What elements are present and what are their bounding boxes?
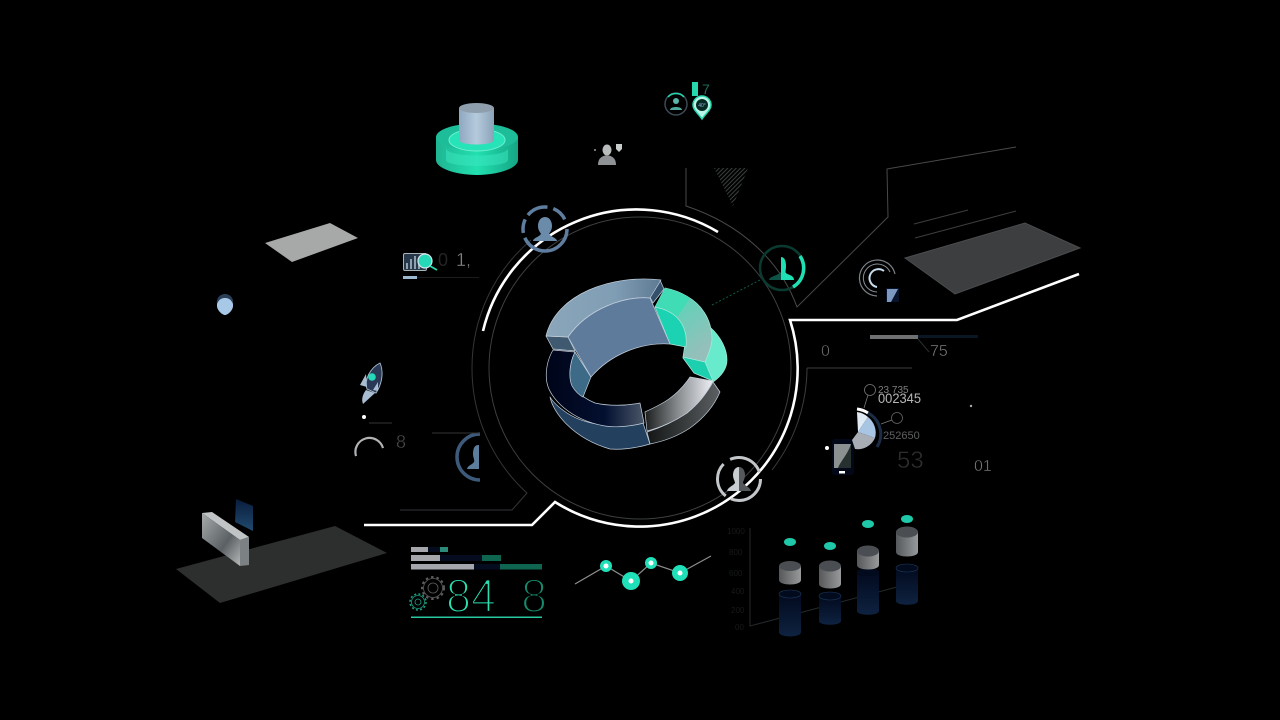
icon: map pin (693, 96, 711, 119)
icon: teal disc and cylinder (436, 103, 518, 175)
bars and counter widget: 84 (446, 569, 496, 622)
panel: grey plate top-left (265, 223, 358, 262)
map fragment (714, 168, 748, 206)
icon: rocket (360, 363, 382, 404)
bar chart: isometric cylinders: 600 (729, 569, 743, 578)
icon: screen (235, 499, 253, 531)
pie chart widget: 002345 (878, 390, 921, 406)
line chart (575, 556, 711, 590)
icon: magnifier panel: 1, (456, 250, 471, 270)
icon: people (594, 144, 622, 165)
cylinder 1 (779, 538, 801, 636)
readout: 0 and 75: 75 (930, 343, 948, 360)
icon: block (202, 512, 249, 566)
readout: 0 and 75 (821, 335, 978, 360)
icon: ring person slate (523, 207, 567, 251)
pie chart widget (852, 384, 992, 475)
pie chart widget: 53 (897, 447, 924, 474)
bar chart: isometric cylinders (727, 515, 918, 636)
icon: magnifier panel (403, 250, 479, 279)
icon: magnifier panel: 0 (438, 250, 448, 270)
icon: battery and value: 7 (702, 81, 710, 97)
icon: ring person teal (760, 246, 804, 290)
bars and counter widget: 8 (521, 569, 547, 622)
bar chart: isometric cylinders: 1000 (727, 527, 745, 536)
gauge readout (355, 415, 406, 456)
icon: ring person fading (432, 433, 480, 480)
dashed connector (712, 280, 760, 305)
bar chart: isometric cylinders: 200 (731, 606, 745, 615)
panel: right plate (905, 223, 1080, 294)
icon: user ring small (665, 93, 687, 115)
icon: battery and value (692, 81, 710, 97)
segment: slate (546, 279, 670, 377)
cylinder 3 (857, 520, 879, 615)
icon: gears (410, 577, 444, 610)
icon: concentric arcs (859, 260, 899, 302)
icon: phone (825, 439, 854, 475)
3D segmented donut chart (546, 279, 727, 449)
icon: head (217, 294, 233, 315)
cylinder 2 (819, 542, 841, 625)
bars and counter widget (410, 547, 547, 622)
segment: navy (546, 350, 650, 449)
bar chart: isometric cylinders: 400 (731, 587, 745, 596)
gauge readout: 8 (396, 432, 406, 452)
cylinder 4 (896, 515, 918, 605)
pie chart widget: 23 735 (878, 385, 909, 396)
pie chart widget: 01 (974, 458, 992, 475)
main ring frame (364, 147, 1079, 527)
readout: 0 and 75: 0 (821, 343, 830, 360)
segment: grey (645, 377, 720, 444)
icon: ring person white (718, 458, 760, 500)
segment: teal (655, 288, 727, 382)
bar chart: isometric cylinders: 00 (735, 623, 744, 632)
bar chart: isometric cylinders: 800 (729, 548, 743, 557)
icon: map pin: 40° (698, 103, 706, 109)
pie chart widget: 252650 (883, 430, 920, 442)
panel: dark plate with block (176, 499, 387, 603)
